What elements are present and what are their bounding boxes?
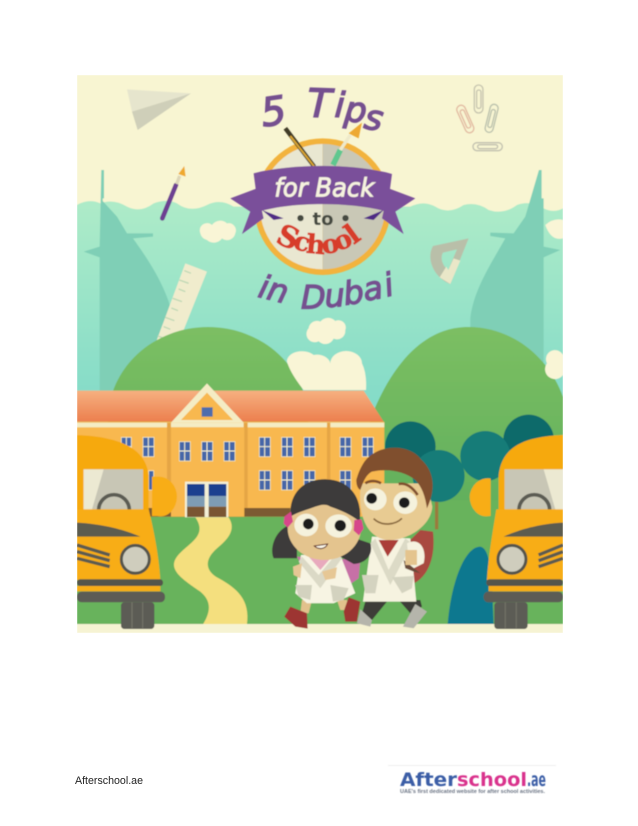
school walls	[77, 422, 384, 517]
boy hair	[356, 448, 433, 508]
badge text: School: h	[305, 230, 327, 261]
hill: left	[110, 326, 306, 422]
school roof	[77, 391, 384, 422]
logo: Afterschool.ae: school	[457, 769, 527, 791]
heading: 5 Tips: s	[361, 97, 386, 140]
character: girl	[272, 479, 371, 629]
bush: blue	[448, 547, 494, 625]
icon: purple paintbrush	[162, 166, 186, 218]
badge circle	[254, 138, 391, 275]
cloud: right	[545, 350, 563, 379]
heading: 5 Tips: T	[307, 82, 335, 128]
badge text: to: • to •	[295, 209, 351, 230]
icon: paper clips	[455, 85, 502, 151]
heading: in Dubai: b	[341, 272, 366, 313]
cloud: under badge	[306, 318, 346, 344]
heading: in Dubai: D	[301, 278, 326, 316]
boy eyes and mouth	[364, 488, 387, 510]
footer text: Afterschool.ae: Afterschool.ae	[75, 775, 143, 787]
logo: Afterschool.ae	[388, 765, 556, 795]
heading: 5 Tips	[258, 82, 386, 140]
cloud: upper left	[200, 221, 236, 243]
background: cream sky	[77, 75, 563, 212]
cloud: behind school	[287, 351, 366, 390]
heading: in Dubai	[255, 265, 398, 316]
background: teal scalloped sky	[77, 201, 563, 437]
boy coat	[363, 537, 416, 602]
heading: 5 Tips: i	[334, 86, 346, 126]
icon: paper plane	[127, 89, 191, 130]
silhouette: left Burj Al Arab	[84, 170, 170, 391]
icon: green paintbrush	[333, 150, 340, 165]
silhouette: right Burj Al Arab	[470, 170, 560, 362]
badge text: School: o	[320, 229, 341, 261]
badge text: School	[271, 216, 366, 261]
ribbon	[230, 166, 415, 234]
boy head	[360, 483, 432, 540]
badge text: School: S	[271, 216, 305, 257]
badge text: School: l	[338, 218, 366, 251]
logo: Afterschool.ae: UAE's first dedicated website for after school activities.	[400, 789, 545, 795]
heading: 5 Tips: p	[342, 90, 369, 132]
boy backpack	[410, 530, 434, 583]
heading: in Dubai: in	[255, 268, 293, 311]
girl eyes and mouth	[294, 514, 318, 536]
character: boy	[356, 448, 434, 628]
badge text: School: c	[291, 226, 313, 259]
ground: grass	[77, 514, 563, 624]
heading: 5 Tips: 5	[258, 89, 289, 137]
icon: pencil	[285, 128, 314, 167]
heading: in Dubai: i	[380, 265, 398, 304]
logo: Afterschool.ae: After	[400, 769, 458, 791]
bus: right	[470, 435, 563, 629]
girl dress	[295, 555, 355, 603]
girl hair bows	[284, 512, 364, 535]
icon: ruler	[154, 263, 207, 347]
school door	[185, 482, 228, 517]
girl hair	[290, 479, 360, 522]
illustration: back to school poster	[77, 75, 563, 633]
badge text: School: o	[329, 223, 357, 258]
boy arm	[407, 542, 424, 570]
girl legs and shoes	[300, 600, 349, 613]
logo: Afterschool.ae: .ae	[527, 769, 546, 791]
cloud: right edge	[545, 219, 563, 239]
girl backpack	[297, 557, 360, 587]
path: yellow road	[174, 517, 247, 624]
girl pigtails	[272, 525, 371, 564]
badge: title emblem	[230, 82, 415, 316]
badge text: for Back: for Back	[274, 174, 375, 204]
trees: teal	[385, 415, 554, 529]
school windows	[121, 437, 373, 490]
building: school	[77, 383, 384, 517]
bus: left	[77, 435, 177, 629]
heading: in Dubai: u	[323, 276, 346, 315]
icon: protractor	[430, 238, 469, 284]
girl head	[288, 497, 361, 560]
hill: right	[371, 326, 563, 501]
school gable	[171, 383, 244, 423]
sidewalk	[77, 623, 563, 626]
heading: in Dubai: a	[360, 268, 386, 309]
boy legs and shoes	[362, 600, 422, 620]
